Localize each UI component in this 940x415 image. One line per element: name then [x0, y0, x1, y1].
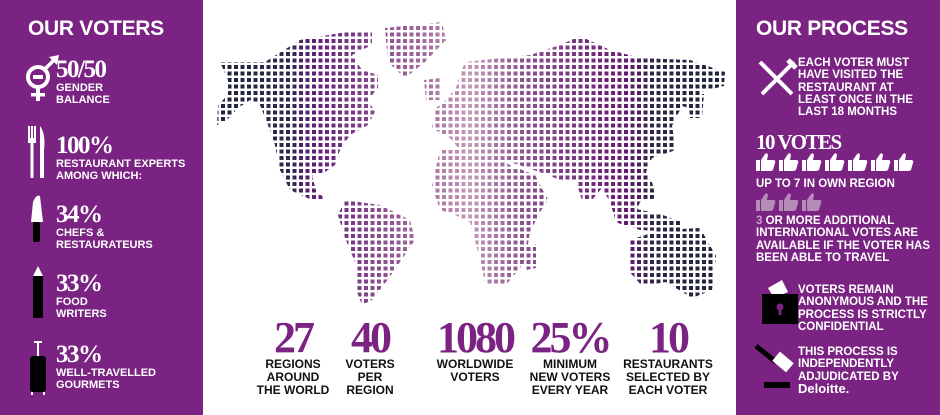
stat: 10 restaurants: 10 — [649, 313, 687, 362]
stat: 40 voters — [345, 313, 395, 397]
icon: suitcase — [30, 341, 46, 395]
icon: pencil — [33, 266, 43, 318]
heading: our voters: OUR VOTERS — [28, 17, 164, 40]
text: each voter must: LEAST ONCE IN THE — [798, 94, 913, 106]
stat: 34%: RESTAURATEURS — [56, 239, 153, 251]
stat: 33% food writers: 33% — [56, 270, 102, 297]
text: each voter must: LAST 18 MONTHS — [798, 106, 897, 118]
stat: 25% new: EVERY YEAR — [532, 383, 608, 397]
stat: 33% gourmets: GOURMETS — [56, 379, 120, 391]
stat: 1080 voters: 1080 — [437, 313, 513, 362]
stat: 1080 voters — [436, 313, 514, 384]
icon: thumbs up x7 — [756, 153, 914, 171]
stat: 27 regions: REGIONS — [265, 357, 321, 371]
world map — [217, 22, 725, 303]
icon: gender — [26, 55, 59, 101]
text: deloitte: THIS PROCESS IS — [798, 346, 898, 358]
stat: 1080 voters: WORLDWIDE — [437, 357, 513, 371]
text: anonymous: ANONYMOUS AND THE — [798, 296, 928, 308]
text: anonymous: CONFIDENTIAL — [798, 321, 884, 333]
stat: 34%: CHEFS & — [56, 227, 104, 239]
stat: 40 voters: REGION — [346, 383, 394, 397]
text: each voter must — [798, 57, 913, 118]
text: deloitte: INDEPENDENTLY — [798, 358, 894, 370]
stat: 34% — [56, 201, 153, 251]
text: 3 or more: 3 OR MORE ADDITIONAL — [756, 215, 894, 227]
text: anonymous — [798, 284, 928, 333]
stat: 50/50: BALANCE — [56, 94, 110, 106]
stat: 100%: 100% — [56, 132, 112, 159]
stat: 50/50: 50/50 — [56, 56, 105, 83]
stat: 40 voters: PER — [358, 370, 382, 384]
stat: 25% new — [530, 313, 610, 397]
icon: crossed cutlery — [758, 58, 798, 96]
stat: 100%: RESTAURANT EXPERTS — [56, 158, 185, 170]
stat: 50/50: GENDER — [56, 82, 103, 94]
heading: 10 votes: 10 VOTES — [756, 130, 841, 154]
text: each voter must: HAVE VISITED THE — [798, 69, 903, 81]
text: deloitte: Deloitte. — [798, 381, 849, 396]
stat: 27 regions: 27 — [274, 313, 312, 362]
stat: 25% new: 25% — [530, 313, 610, 362]
stat: 33% gourmets: WELL-TRAVELLED — [56, 367, 156, 379]
text: up to 7: UP TO 7 IN OWN REGION — [756, 178, 895, 190]
stat: 27 regions: THE WORLD — [257, 383, 329, 397]
stat: 33% food writers: FOOD — [56, 296, 88, 308]
text: 3 or more: BEEN ABLE TO TRAVEL — [756, 252, 889, 264]
stat: 50/50 — [56, 56, 110, 106]
stat: 33% gourmets: 33% — [56, 341, 102, 368]
text: each voter must: RESTAURANT AT — [798, 82, 894, 94]
text: anonymous: PROCESS IS STRICTLY — [798, 309, 927, 321]
stat: 40 voters: 40 — [351, 313, 389, 362]
text: each voter must: EACH VOTER MUST — [798, 57, 909, 69]
icon: fork and knife — [28, 126, 44, 178]
text: 3 or more: AVAILABLE IF THE VOTER HAS — [756, 240, 930, 252]
stat: 25% new: NEW VOTERS — [530, 370, 610, 384]
stat: 27 regions — [256, 313, 329, 397]
text: 3 or more — [756, 215, 930, 264]
stat: 100% — [56, 132, 185, 182]
panel: our voters — [0, 0, 203, 415]
stat: 27 regions: AROUND — [267, 370, 319, 384]
stat: 100%: AMONG WHICH: — [56, 170, 142, 182]
stat: 33% gourmets — [56, 341, 156, 391]
text: deloitte: ADJUDICATED BY — [798, 371, 899, 383]
text: anonymous: VOTERS REMAIN — [798, 284, 894, 296]
icon: gavel — [754, 344, 794, 388]
icon: ballot box — [762, 280, 798, 324]
icon: knife — [31, 196, 43, 242]
stat: 1080 voters: VOTERS — [450, 370, 500, 384]
stat: 10 restaurants: RESTAURANTS — [623, 357, 713, 371]
stat: 34%: 34% — [56, 201, 102, 228]
stat: 40 voters: VOTERS — [345, 357, 395, 371]
stat: 33% food writers — [56, 270, 107, 320]
stat: 33% food writers: WRITERS — [56, 308, 107, 320]
stat: 10 restaurants: SELECTED BY — [626, 370, 710, 384]
icon: thumbs up x3 — [756, 193, 822, 211]
panel: our process — [736, 0, 940, 415]
stat: 10 restaurants: EACH VOTER — [629, 383, 707, 397]
stat: 25% new: MINIMUM — [543, 357, 597, 371]
text: 3 or more: INTERNATIONAL VOTES ARE — [756, 227, 918, 239]
heading: our process: OUR PROCESS — [756, 17, 908, 40]
text: deloitte — [798, 346, 899, 396]
stat: 10 restaurants — [623, 313, 713, 397]
